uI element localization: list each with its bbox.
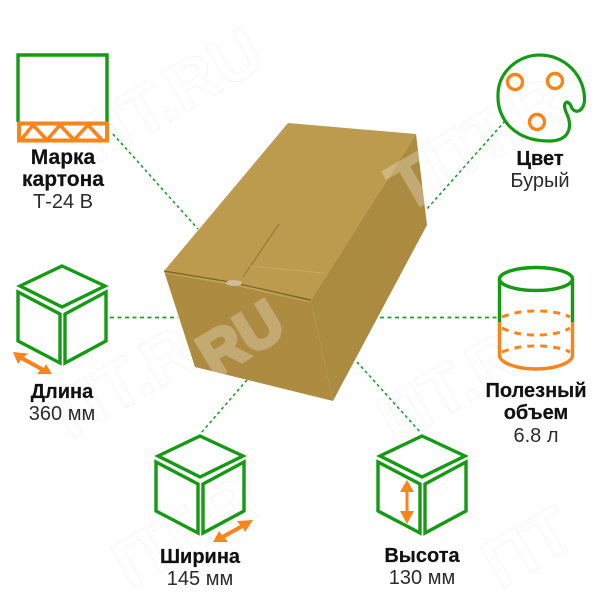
panel: cardboard grade bbox=[18, 55, 107, 169]
faint background watermarks: ПТ.R bbox=[410, 62, 578, 203]
box watermark letters: RU bbox=[186, 287, 295, 389]
panel: length bbox=[13, 266, 106, 403]
heading: Марка: Марка bbox=[31, 146, 96, 169]
heading: Высота: Высота bbox=[384, 545, 461, 567]
box right face bbox=[311, 134, 427, 401]
box watermark letters bbox=[186, 138, 451, 389]
panel: width bbox=[156, 436, 253, 568]
icon: cube with height arrow bbox=[378, 436, 466, 533]
panel: height bbox=[378, 436, 466, 567]
box watermark letters: T bbox=[374, 138, 451, 227]
heading: Длина: Длина bbox=[31, 381, 94, 403]
dotted connector lines bbox=[110, 121, 505, 433]
heading: Цвет: Цвет bbox=[516, 148, 564, 170]
heading: объем: объем bbox=[504, 402, 568, 424]
icon: palette bbox=[498, 55, 585, 141]
value: 360 мм: 360 мм bbox=[29, 403, 95, 425]
value: 130 мм: 130 мм bbox=[389, 567, 455, 589]
panel: colour bbox=[498, 55, 585, 170]
box flap crack and seams bbox=[164, 224, 323, 302]
panel: usable volume bbox=[485, 268, 587, 402]
faint background watermarks: ПТ.R bbox=[100, 462, 268, 600]
faint background watermarks: ПТ.R bbox=[364, 317, 533, 458]
icon: cylinder bbox=[500, 268, 572, 369]
value: 145 мм: 145 мм bbox=[167, 568, 233, 590]
heading: Полезный: Полезный bbox=[485, 380, 587, 402]
heading: Ширина: Ширина bbox=[160, 546, 241, 568]
value: Бурый: Бурый bbox=[510, 170, 570, 192]
cardboard box photo illustration bbox=[164, 123, 451, 401]
box front face bbox=[164, 271, 333, 401]
faint background watermarks: ПТ.RU bbox=[64, 12, 276, 178]
value: Т-24 В: Т-24 В bbox=[33, 191, 93, 213]
icon: cube with length arrow bbox=[13, 266, 106, 374]
faint background watermarks: ПТ.R bbox=[40, 312, 208, 453]
icon: corrugated cardboard bbox=[18, 55, 107, 140]
icon: cube with width arrow bbox=[156, 436, 253, 542]
heading: картона: картона bbox=[22, 168, 104, 191]
faint background watermarks: ПТ bbox=[470, 492, 586, 600]
box top face bbox=[164, 123, 416, 300]
value: 6.8 л: 6.8 л bbox=[513, 425, 559, 447]
